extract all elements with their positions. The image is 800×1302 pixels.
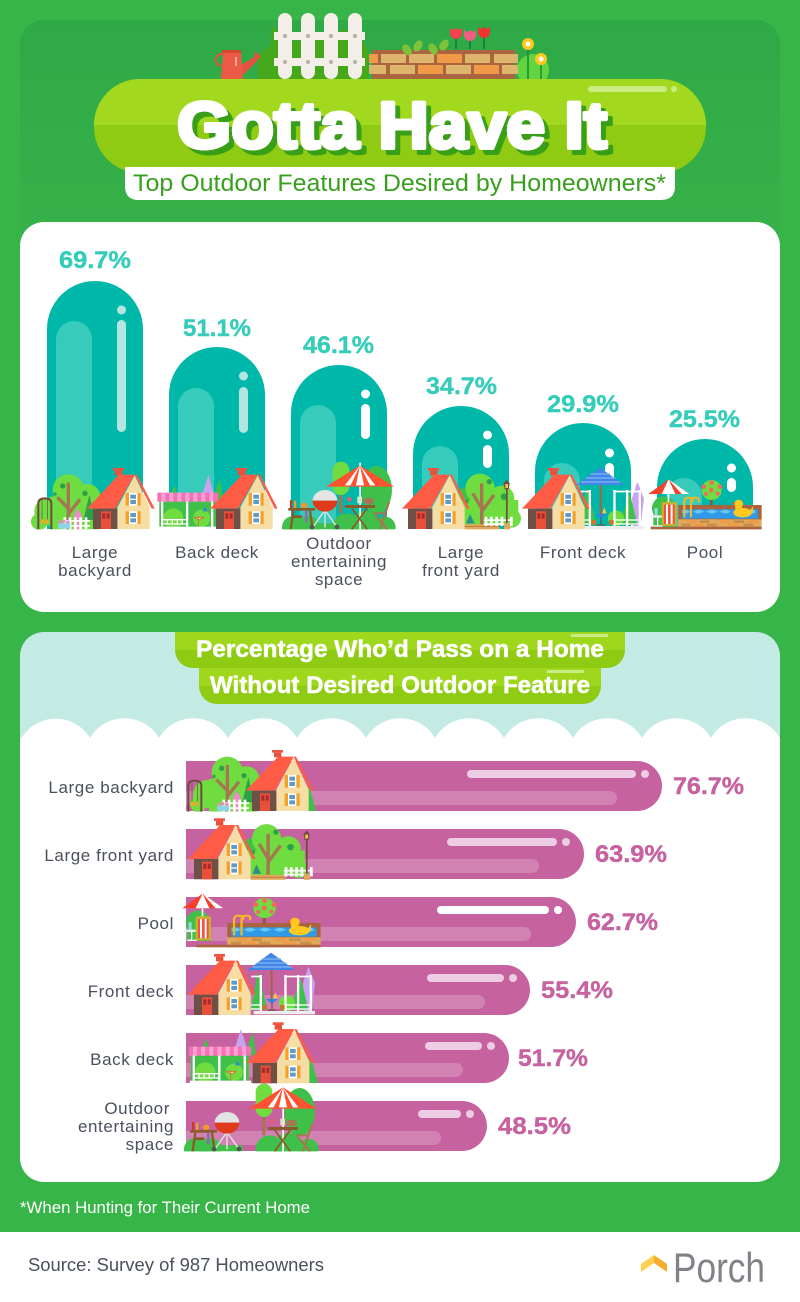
row: pool 62.7% — [138, 894, 658, 947]
value: 51.1% — [183, 315, 251, 342]
bar: back deck 51.1% — [169, 315, 265, 529]
bar — [186, 965, 530, 1015]
value: 69.7% — [59, 247, 131, 274]
label: large front yard: Large — [438, 543, 484, 562]
label: outdoor entertaining space: space — [315, 570, 363, 589]
heading line 2: Without Desired Outdoor Feature — [210, 672, 590, 699]
panel: top outdoor features — [20, 222, 780, 612]
label: outdoor entertaining space: Outdoor — [306, 534, 372, 553]
bar: large front yard 34.7% — [413, 373, 509, 529]
icon: backyard with house — [31, 468, 155, 530]
icon: front yard with house — [188, 818, 313, 880]
footnote: *When Hunting for Their Current Home — [20, 1199, 310, 1217]
icon: back deck with house — [157, 468, 278, 529]
bar: outdoor entertaining space 46.1% — [291, 332, 387, 529]
icon: pool with duck — [648, 479, 762, 529]
bar: large backyard 69.7% — [47, 247, 143, 529]
value: 29.9% — [547, 391, 619, 418]
source: Source: Survey of 987 Homeowners — [28, 1255, 324, 1275]
icon: backyard with house — [188, 750, 316, 812]
value: 51.7% — [518, 1045, 588, 1072]
icon: chevron — [641, 1255, 667, 1272]
bar — [186, 761, 662, 811]
row: large backyard 76.7% — [48, 750, 744, 812]
label: back deck: Back deck — [175, 543, 259, 562]
bar — [186, 897, 576, 947]
label: entertaining — [78, 1117, 174, 1136]
value: 55.4% — [541, 977, 613, 1004]
heading line 1 — [175, 632, 625, 668]
icon: grill and patio umbrella — [282, 462, 396, 541]
panel background — [20, 222, 780, 612]
bar — [186, 1033, 509, 1083]
label: Large backyard — [48, 778, 174, 797]
value: 46.1% — [303, 332, 374, 359]
row: large front yard 63.9% — [44, 818, 667, 880]
label: large backyard: backyard — [58, 561, 132, 580]
header panel — [20, 20, 780, 250]
mint header background — [20, 632, 780, 760]
white scalloped panel — [20, 718, 780, 1182]
panel: percentage who'd pass — [20, 632, 780, 1182]
label: large backyard: Large — [72, 543, 118, 562]
icon: yellow flowers — [522, 38, 547, 79]
bar — [186, 829, 584, 879]
value: 25.5% — [669, 406, 740, 433]
value: 62.7% — [587, 909, 658, 936]
icon: leaves and tulips — [400, 27, 490, 57]
label: Pool — [138, 914, 174, 933]
row: back deck 51.7% — [90, 1022, 588, 1083]
icon: front deck with house — [522, 468, 644, 529]
icon: pool with duck — [182, 894, 321, 947]
icon: front yard with house — [402, 468, 521, 529]
icon: front deck with house — [188, 953, 315, 1015]
label: space — [126, 1135, 174, 1154]
value: 48.5% — [498, 1113, 571, 1140]
bar: pool 25.5% — [657, 406, 753, 529]
logo: Porch: Porch — [673, 1244, 765, 1291]
value: 63.9% — [595, 841, 667, 868]
label: front deck: Front deck — [540, 543, 626, 562]
title: Gotta Have It — [177, 88, 607, 162]
label: large front yard: front yard — [422, 561, 500, 580]
value: 34.7% — [426, 373, 497, 400]
label: Outdoor — [104, 1099, 170, 1118]
value: 76.7% — [673, 773, 744, 800]
icon: back deck with house — [189, 1022, 318, 1083]
icon: watering can — [216, 50, 261, 79]
icon: white picket fence — [274, 13, 365, 79]
label: Back deck — [90, 1050, 174, 1069]
label: outdoor entertaining space: entertaining — [291, 552, 387, 571]
bar — [186, 1101, 487, 1151]
label: Front deck — [88, 982, 174, 1001]
footer bar — [0, 1232, 800, 1302]
logo: Porch — [641, 1244, 765, 1291]
icon: brick planter — [369, 50, 518, 79]
label: pool: Pool — [687, 543, 723, 562]
row: front deck 55.4% — [88, 953, 613, 1015]
bar: front deck 29.9% — [535, 391, 631, 529]
icon: bushes behind fence — [258, 26, 549, 86]
title banner — [94, 79, 706, 200]
garden illustration — [216, 13, 549, 86]
label: Large front yard — [44, 846, 174, 865]
icon: grill and patio umbrella — [184, 1084, 319, 1163]
banner pill — [94, 79, 706, 173]
heading line 1: Percentage Who’d Pass on a Home — [196, 636, 604, 663]
subtitle: Top Outdoor Features Desired by Homeowners* — [133, 170, 666, 197]
row: outdoor entertaining space 48.5% — [78, 1084, 571, 1163]
